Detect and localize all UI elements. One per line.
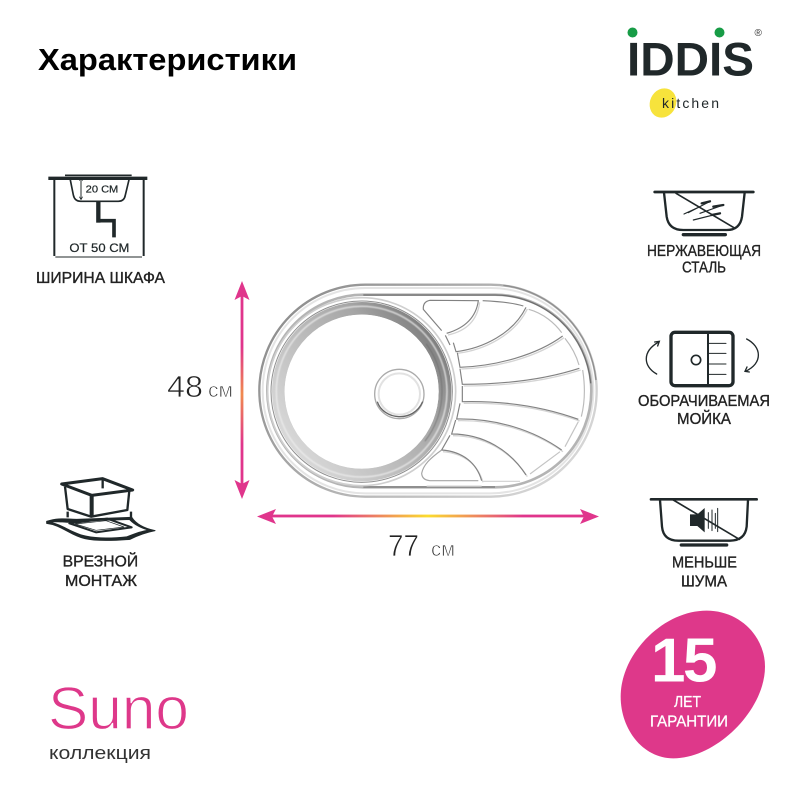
dimension: height 48 cm: см — [208, 380, 233, 402]
badge: pink blob — [621, 611, 765, 758]
icon: reversible sink — [646, 332, 758, 386]
label: stainless steel: НЕРЖАВЕЮЩАЯ — [647, 243, 761, 260]
sink illustration — [259, 285, 597, 497]
logo: registered mark: ® — [754, 28, 762, 39]
dimension: height 48 cm: 48 — [167, 369, 203, 404]
sink: outer rim — [259, 285, 597, 497]
logo: green dot right — [714, 28, 724, 38]
arrow: width dimension — [257, 509, 599, 524]
icon: cabinet width: ОТ 50 СМ — [69, 241, 129, 255]
badge: warranty: ГАРАНТИИ — [650, 714, 728, 731]
dimension: width 77 cm: 77 — [388, 528, 419, 563]
badge: number: 15 — [651, 627, 717, 696]
collection label: коллекция — [49, 743, 151, 763]
label: flush mounting line 2: МОНТАЖ — [65, 573, 138, 590]
logo: green dot left — [628, 28, 638, 38]
sink: inner rim — [267, 295, 591, 487]
title: Характеристики — [38, 42, 297, 77]
label: less noise line 2: ШУМА — [681, 574, 728, 591]
label: cabinet width: ШИРИНА ШКАФА — [36, 270, 166, 287]
label: less noise: МЕНЬШЕ — [672, 555, 737, 572]
collection name: Suno — [48, 675, 189, 742]
sink: drain — [375, 369, 424, 419]
logo: yellow blob — [645, 84, 681, 122]
dimension: height 48 cm — [167, 369, 233, 404]
arrow: height dimension — [234, 281, 250, 499]
icon: cabinet width — [48, 175, 147, 257]
label: reversible sink line 2: МОЙКА — [677, 410, 732, 428]
dimension: width 77 cm — [388, 528, 455, 563]
icon: flush mounting — [47, 479, 155, 540]
badge: years: ЛЕТ — [674, 694, 701, 711]
sink: bowl — [268, 298, 456, 486]
label: reversible sink: ОБОРАЧИВАЕМАЯ — [638, 393, 770, 410]
icon: cabinet width: 20 СМ — [86, 185, 118, 196]
icon: less noise — [651, 499, 757, 545]
logo: IDDIS kitchen — [627, 28, 762, 122]
warranty badge — [621, 611, 765, 758]
label: flush mounting: ВРЕЗНОЙ — [63, 552, 138, 570]
label: stainless steel line 2: СТАЛЬ — [682, 260, 726, 277]
sink: drainboard ribs — [422, 300, 584, 482]
icon: stainless steel — [655, 192, 753, 235]
logo: kitchen: kitchen — [662, 95, 719, 111]
dimension: width 77 cm: см — [431, 539, 455, 561]
logo: wordmark: IDDIS — [627, 32, 754, 86]
